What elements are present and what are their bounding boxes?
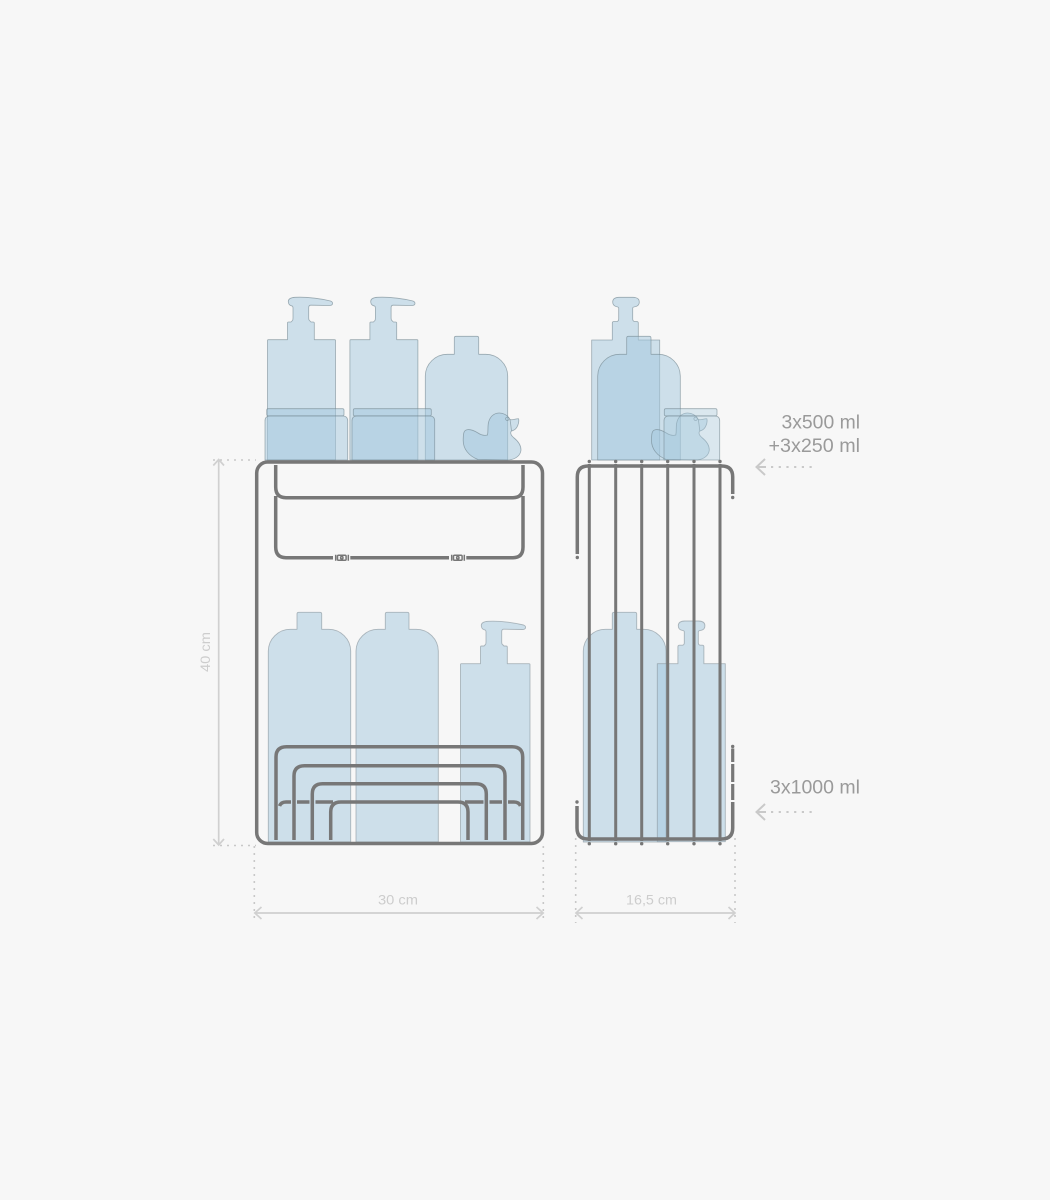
height dimension: 40 cm xyxy=(197,460,256,846)
large bottle 1 xyxy=(268,612,351,842)
pump bottle side xyxy=(657,621,725,842)
panel: front view bottles, top shelf xyxy=(265,297,521,460)
rubber duck side xyxy=(651,413,709,460)
large bottle side xyxy=(583,612,666,842)
large bottle xyxy=(425,336,508,460)
panel: side view wire rack xyxy=(575,460,734,845)
label: 30 cm: 30 cm xyxy=(378,892,418,908)
rack outer frame xyxy=(257,462,542,844)
label: 40 cm: 40 cm xyxy=(197,632,213,672)
vertical wires xyxy=(589,464,720,841)
callout: bottom shelf capacity: 3x1000 ml xyxy=(770,778,860,798)
top hook xyxy=(577,466,733,554)
clip 2 xyxy=(452,555,464,561)
upper basket rim xyxy=(276,465,523,498)
side wire dashes xyxy=(731,748,734,800)
pump bottle 1 xyxy=(268,297,336,460)
callout: top shelf capacity: 3x500 ml xyxy=(782,412,860,434)
icon: rubber duck xyxy=(463,413,521,460)
large bottle side xyxy=(598,336,680,460)
wire ends xyxy=(575,460,734,845)
width dimension: 30 cm xyxy=(254,846,543,923)
label: 16,5 cm: 16,5 cm xyxy=(626,892,677,908)
upper basket with clips xyxy=(276,496,523,561)
panel: front view wire rack xyxy=(257,462,542,844)
panel: side view bottles, top shelf xyxy=(592,297,720,460)
jar 2 xyxy=(352,409,435,460)
clip 1 xyxy=(336,555,348,561)
callout: top shelf capacity xyxy=(756,412,860,475)
panel: side view bottles, bottom shelf xyxy=(583,612,725,842)
jar side xyxy=(664,409,720,460)
arrow: bottom shelf xyxy=(756,804,813,820)
jar 1 xyxy=(265,409,348,460)
callout: bottom shelf capacity xyxy=(756,778,860,820)
pump bottle 2 xyxy=(350,297,418,460)
callout: top shelf capacity: +3x250 ml xyxy=(768,436,860,457)
panel: front view bottles, bottom shelf xyxy=(268,612,530,842)
pump bottle xyxy=(460,621,530,842)
large bottle 2 xyxy=(356,612,438,842)
lower nested wires xyxy=(276,747,523,840)
bottom hook xyxy=(577,802,733,839)
pump bottle side xyxy=(592,297,660,460)
arrow: top shelf xyxy=(756,459,813,475)
depth dimension: 16,5 cm xyxy=(576,838,735,923)
